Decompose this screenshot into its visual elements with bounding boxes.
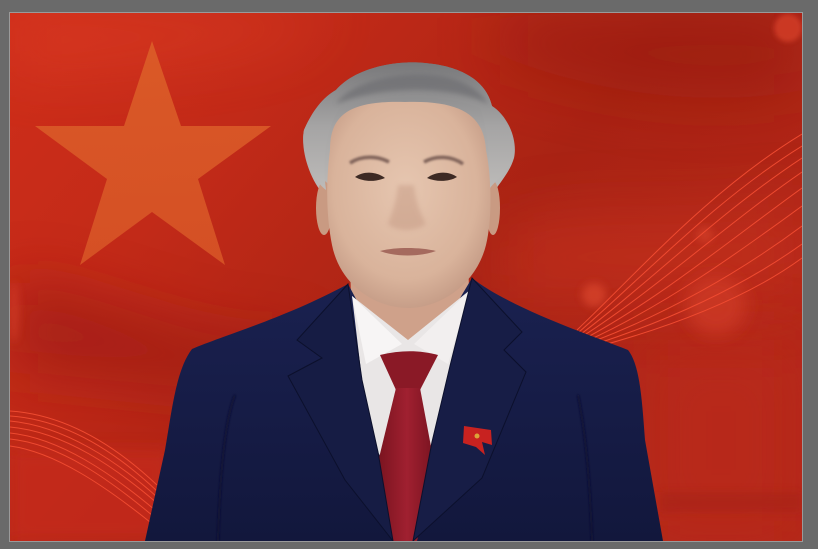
mouth	[380, 248, 436, 256]
curved lines right	[577, 134, 802, 346]
hair back	[303, 62, 515, 195]
hair fringe	[303, 62, 514, 190]
star	[35, 41, 271, 265]
lapel pin	[463, 426, 492, 455]
suit jacket	[145, 278, 663, 541]
tie	[379, 351, 438, 541]
eyes	[355, 173, 385, 181]
eyebrows	[350, 157, 389, 163]
nose	[388, 185, 426, 230]
ears	[316, 181, 330, 235]
face	[327, 102, 490, 308]
lapels	[288, 284, 393, 541]
arm shadow lines	[218, 395, 235, 541]
curved lines left	[10, 411, 157, 522]
shirt collar	[352, 291, 468, 456]
neck	[350, 278, 469, 340]
